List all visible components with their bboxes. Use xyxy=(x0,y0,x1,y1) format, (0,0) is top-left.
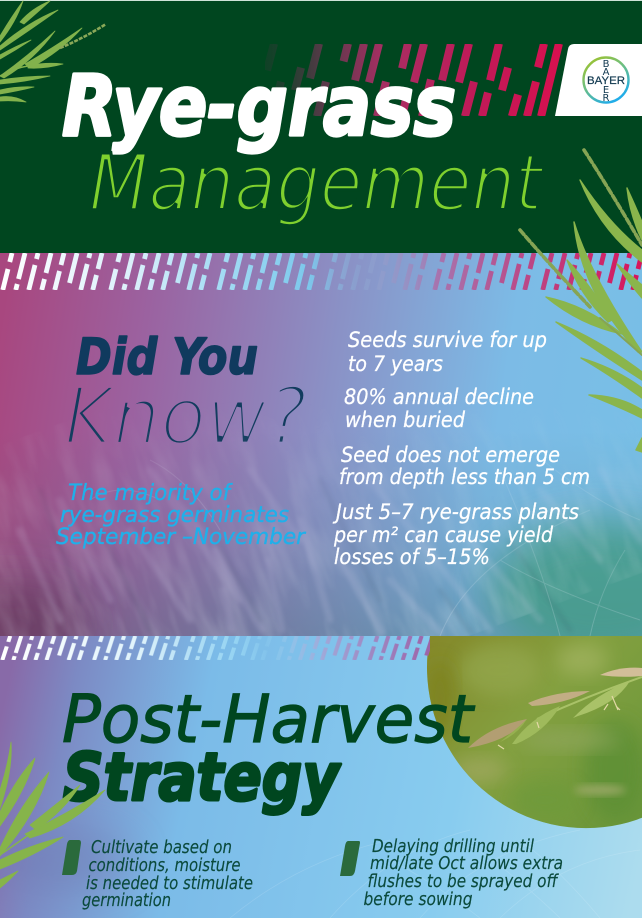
logo: Bayer: B xyxy=(603,59,610,70)
icon: bullet right xyxy=(340,841,360,876)
logo: Bayer: E xyxy=(603,85,609,96)
text block: delay drilling: flushes to be sprayed off xyxy=(368,871,559,892)
text block: cultivate: is needed to stimulate xyxy=(86,873,253,894)
callout: delay drilling xyxy=(340,836,563,910)
text block: delay drilling: Delaying drilling until xyxy=(372,836,534,857)
icon: grass lower left xyxy=(0,742,105,888)
text block: cultivate: conditions, moisture xyxy=(88,855,240,876)
icon: seed head xyxy=(468,668,642,749)
fact: yield losses: per m² can cause yield xyxy=(333,523,554,547)
fact: yield losses xyxy=(332,500,579,569)
fact: annual decline xyxy=(344,385,534,432)
text block: cultivate xyxy=(82,837,253,911)
fact: yield losses: losses of 5–15% xyxy=(334,545,490,569)
fact: annual decline: 80% annual decline xyxy=(344,385,534,409)
fact: seed survival xyxy=(348,328,547,376)
text block: germination timing: September –November xyxy=(56,525,307,550)
heading: Know?: Know? xyxy=(64,370,307,463)
text block: cultivate: germination xyxy=(82,890,171,911)
text block: delay drilling: mid/late Oct allows extra xyxy=(370,853,563,874)
text block: germination timing: rye-grass germinates xyxy=(60,503,289,528)
photo: grass seed head in circle xyxy=(420,636,642,836)
heading: Post-Harvest: Post-Harvest xyxy=(62,681,475,758)
panel: did you know xyxy=(0,253,642,636)
icon: grass top left xyxy=(0,1,106,102)
fact: yield losses: Just 5–7 rye-grass plants xyxy=(332,500,579,524)
callout: cultivate xyxy=(62,837,253,911)
fact: emergence depth xyxy=(339,443,590,489)
logo: Bayer: R xyxy=(603,93,610,104)
fact: annual decline: when buried xyxy=(345,408,466,432)
text block: delay drilling: before sowing xyxy=(364,889,472,910)
text block: germination timing xyxy=(56,481,307,550)
fact: emergence depth: from depth less than 5 cm xyxy=(339,465,590,489)
dash pattern: did you know band xyxy=(0,253,642,290)
heading: Strategy: Strategy xyxy=(63,739,342,816)
heading: Did You: Did You xyxy=(76,328,258,386)
text block: germination timing: The majority of xyxy=(68,481,233,506)
texture: blurred grass xyxy=(0,440,642,636)
fact: seed survival: to 7 years xyxy=(348,352,443,376)
text block: seed facts xyxy=(332,328,590,569)
dash pattern: post-harvest band xyxy=(0,636,430,660)
panel: header xyxy=(0,0,642,224)
icon: bullet left xyxy=(62,840,81,875)
logo: Bayer: BAYER xyxy=(587,75,625,87)
text block: cultivate: Cultivate based on xyxy=(91,837,232,858)
dash pattern: header xyxy=(265,44,565,116)
fact: seed survival: Seeds survive for up xyxy=(348,328,547,352)
fact: emergence depth: Seed does not emerge xyxy=(341,443,560,467)
logo: Bayer: A xyxy=(603,67,610,78)
logo: Bayer xyxy=(555,44,642,116)
title: Rye-grass: Rye-grass xyxy=(62,57,456,155)
icon: grass right side xyxy=(520,150,642,452)
text block: delay drilling xyxy=(364,836,563,910)
panel: post-harvest background xyxy=(0,636,642,918)
title: Management: Management xyxy=(89,139,544,229)
